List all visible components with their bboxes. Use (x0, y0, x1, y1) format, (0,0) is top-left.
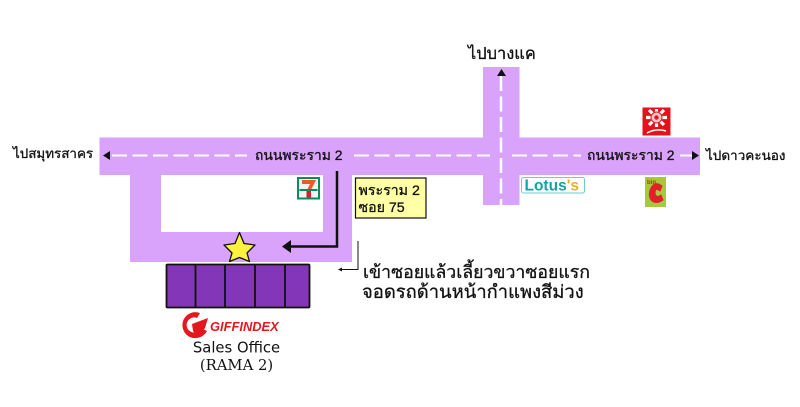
pointer arrow to instructions (338, 241, 358, 272)
direction arrow: up (497, 69, 506, 76)
callout: Rama 2 Soi 75 sign (356, 178, 426, 218)
instruction text: จอดรถด้านหน้ากำแพงสีม่วง (362, 281, 584, 302)
logo: Giffindex (182, 312, 280, 338)
label: to Samut Sakhon: ไปสมุทรสาคร (12, 146, 93, 162)
icon: Big C (645, 177, 666, 207)
icon: location star (224, 232, 255, 262)
road name left: ถนนพระราม 2 (255, 147, 343, 163)
label: to Bang Khae: ไปบางแค (466, 44, 536, 63)
icon: Big C: big (647, 180, 656, 186)
label: to Dao Khanong: ไปดาวคะนอง (705, 148, 786, 163)
purple building row (166, 264, 310, 308)
instruction text: เข้าซอยแล้วเลี้ยวขวาซอยแรก (363, 259, 590, 282)
direction arrow: right (692, 151, 699, 160)
callout: Rama 2 Soi 75 sign: พระราม 2 (358, 183, 420, 199)
direction arrow: left (103, 151, 110, 160)
office label: (RAMA 2) (200, 357, 273, 374)
road centre dashes (112, 76, 692, 205)
arrow: turn into soi (282, 171, 337, 253)
callout: Rama 2 Soi 75 sign: ซอย 75 (358, 200, 405, 216)
instruction text (362, 259, 590, 302)
road network (100, 67, 700, 262)
icon: 7-Eleven (297, 177, 320, 200)
icon: Central (642, 108, 670, 136)
icon: Lotus's: Lotus's (524, 178, 579, 194)
logo: Giffindex: GIFFINDEX (210, 319, 280, 334)
road name right: ถนนพระราม 2 (587, 147, 675, 163)
office label (193, 340, 280, 374)
office label: Sales Office (193, 340, 280, 356)
